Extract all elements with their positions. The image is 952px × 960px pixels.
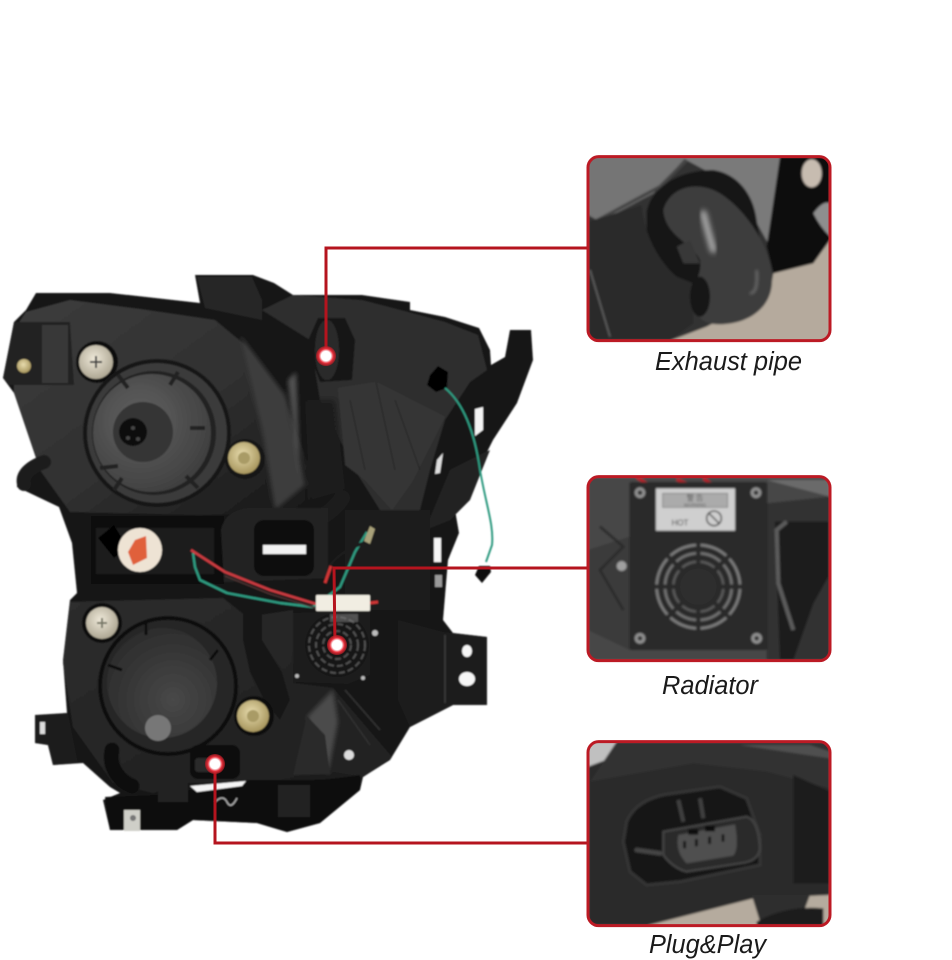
screw: upper gold — [225, 439, 265, 479]
black wire loop — [328, 537, 421, 604]
marker: radiator — [327, 635, 347, 655]
callout line: radiator — [334, 568, 587, 645]
panel border — [588, 157, 830, 341]
upper right bracket — [262, 295, 487, 520]
warning label: WARNING — [684, 502, 707, 507]
label: plug and play: Plug&Play — [649, 931, 768, 959]
clip metal — [124, 810, 140, 831]
callout line: plug — [215, 764, 587, 843]
screw: top cream — [76, 341, 118, 383]
plug socket — [190, 745, 240, 779]
upper lens — [83, 359, 231, 507]
warning label — [656, 488, 735, 531]
panel: exhaust pipe detail — [588, 157, 830, 341]
callout line: exhaust pipe — [326, 248, 587, 356]
shaded ridge — [240, 335, 345, 510]
marker: plug — [205, 754, 225, 774]
label: radiator: Radiator — [662, 672, 759, 700]
housing silhouette — [3, 275, 533, 832]
fan grille — [654, 542, 743, 631]
cavity bezel — [221, 508, 328, 582]
exhaust socket — [306, 318, 355, 382]
screw: small gold — [17, 359, 31, 373]
lower housing — [63, 598, 392, 793]
panel: radiator detail — [588, 477, 830, 661]
bottom feet — [105, 775, 360, 832]
ring terminal — [364, 526, 375, 544]
red wires — [191, 550, 316, 604]
bottom hose — [111, 750, 132, 786]
bulb plug and sticker — [98, 525, 162, 572]
fan module — [293, 610, 378, 684]
lower lens — [98, 616, 238, 756]
screw: lower cream — [82, 603, 122, 643]
left hose — [24, 462, 44, 484]
bracket window — [263, 545, 306, 554]
warning label: HOT — [672, 518, 689, 527]
lower right ribbed wedge — [333, 688, 392, 777]
external connector — [475, 566, 491, 583]
right mounting bracket — [398, 620, 487, 727]
panel: plug and play detail — [588, 742, 830, 926]
screw: lower gold — [234, 696, 274, 736]
connector socket — [623, 787, 760, 885]
white connector — [316, 595, 370, 611]
warning label: 警 告 — [687, 494, 703, 503]
top tab — [197, 277, 262, 320]
panel border — [588, 477, 830, 661]
left tab block — [3, 322, 74, 385]
label: exhaust pipe: Exhaust pipe — [655, 348, 802, 376]
green wires — [445, 388, 492, 562]
bottom hose upper — [308, 498, 342, 526]
panel border — [588, 742, 830, 926]
socket hole — [427, 366, 448, 392]
connector plug — [663, 817, 760, 872]
lamp cavity — [91, 516, 224, 584]
marker: exhaust — [316, 346, 336, 366]
left lower clip — [35, 713, 78, 765]
ribbed panel — [338, 382, 445, 510]
headlight assembly rear view — [3, 275, 533, 832]
white window slots — [434, 407, 483, 587]
upper lens housing — [14, 300, 310, 515]
